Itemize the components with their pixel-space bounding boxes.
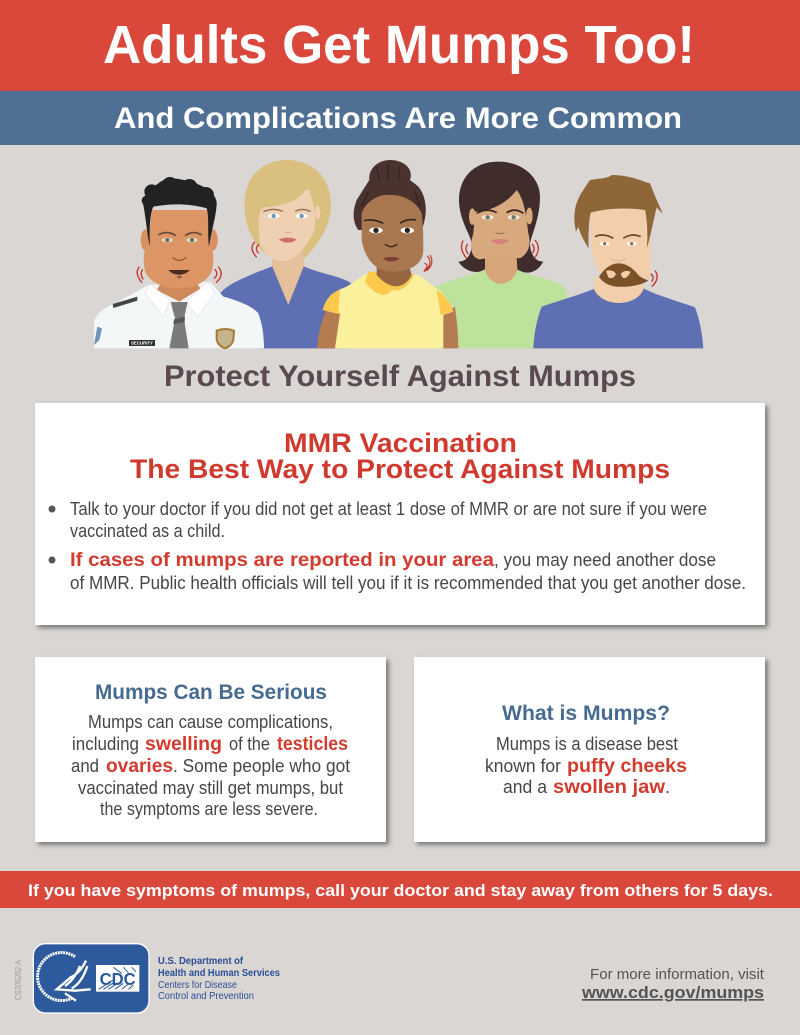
bullet: cases in your area: of MMR. Public health officials will tell you if it is recommended that you get another dose. bbox=[70, 573, 746, 593]
panel text: puffy cheeks bbox=[567, 756, 687, 777]
panel text: testicles bbox=[277, 734, 348, 755]
bullet: talk to your doctor: vaccinated as a child. bbox=[70, 521, 225, 541]
panel: MMR vaccination bbox=[35, 403, 765, 625]
bullet: cases in your area: If cases of mumps are reported in your area bbox=[70, 550, 494, 571]
agency name: U.S. Department of bbox=[158, 956, 244, 967]
panel text: and a bbox=[503, 777, 548, 797]
person: security guard bbox=[94, 177, 264, 348]
section heading: Protect Yourself Against Mumps bbox=[164, 360, 636, 393]
callout banner bbox=[0, 871, 800, 908]
person: bearded man in blue bbox=[533, 175, 703, 348]
panel text bbox=[71, 712, 350, 819]
panel text: . Some people who got bbox=[173, 756, 350, 776]
person: blonde woman in blue bbox=[219, 160, 353, 348]
title banner bbox=[0, 0, 800, 91]
icon: HHS eagle bbox=[38, 953, 91, 1001]
illustration: five adults with swollen jaws bbox=[94, 160, 703, 348]
agency name: Control and Prevention bbox=[158, 991, 254, 1002]
bullet: talk to your doctor: Talk to your doctor if you did not get at least 1 dose of MMR or are not sure if you were bbox=[70, 499, 707, 519]
subtitle banner bbox=[0, 91, 800, 145]
panel text: Mumps is a disease best bbox=[496, 734, 678, 754]
panel text: the symptoms are less severe. bbox=[100, 799, 318, 819]
bullet: talk to your doctor bbox=[48, 499, 707, 541]
panel text: of the bbox=[229, 734, 270, 754]
panel text: including bbox=[72, 734, 139, 754]
bullet: cases in your area: , you may need another dose bbox=[494, 550, 716, 570]
more information bbox=[581, 966, 765, 1002]
panel heading: Mumps Can Be Serious bbox=[95, 681, 327, 704]
subtitle banner: And Complications Are More Common bbox=[114, 102, 682, 135]
panel text: . bbox=[665, 777, 670, 797]
panel text: and bbox=[71, 756, 99, 776]
panel heading: What is Mumps? bbox=[502, 702, 670, 725]
person: woman in yellow with hair bun bbox=[317, 160, 458, 348]
icon: CDC mark: CDC bbox=[100, 969, 136, 989]
panel heading: MMR Vaccination bbox=[284, 428, 517, 458]
bullet: cases in your area bbox=[48, 550, 746, 593]
panel: what is mumps bbox=[414, 657, 765, 842]
agency name: Health and Human Services bbox=[158, 968, 280, 979]
person: security guard: SECURITY bbox=[131, 340, 153, 345]
callout banner: If you have symptoms of mumps, call your doctor and stay away from others for 5 days. bbox=[28, 881, 773, 900]
publication code: CS306282-A bbox=[14, 959, 23, 1000]
panel text bbox=[485, 734, 687, 798]
person: dark-haired woman in green bbox=[435, 162, 568, 348]
more information: www.cdc.gov/mumps bbox=[581, 983, 764, 1002]
title banner: Adults Get Mumps Too! bbox=[103, 15, 695, 75]
panel heading: The Best Way to Protect Against Mumps bbox=[130, 454, 670, 484]
panel text: vaccinated may still get mumps, but bbox=[78, 778, 343, 798]
logo: HHS and CDC bbox=[33, 944, 149, 1013]
panel heading bbox=[130, 428, 670, 484]
panel text: swollen jaw bbox=[553, 777, 665, 798]
panel text: known for bbox=[485, 756, 561, 776]
agency name bbox=[158, 956, 280, 1002]
panel text: Mumps can cause complications, bbox=[88, 712, 333, 732]
panel text: ovaries bbox=[106, 756, 173, 777]
more information: For more information, visit bbox=[590, 966, 765, 983]
agency name: Centers for Disease bbox=[158, 980, 237, 991]
panel: mumps can be serious bbox=[35, 657, 386, 842]
panel text: swelling bbox=[145, 734, 222, 755]
